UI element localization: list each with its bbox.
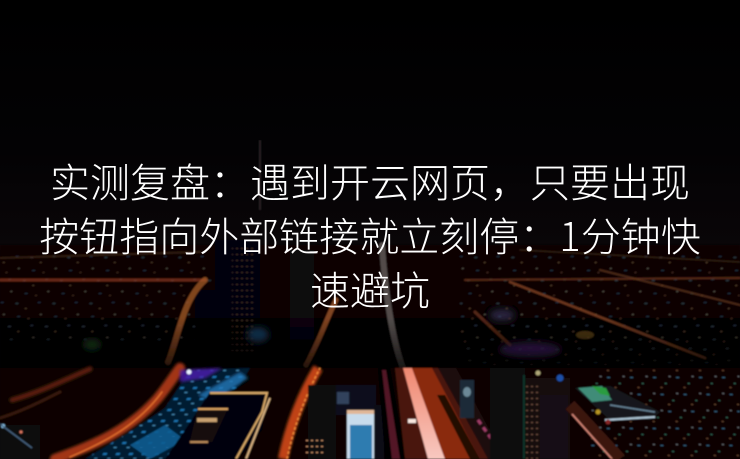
building with lit edges <box>165 392 270 459</box>
road with white light trail, right <box>570 405 620 459</box>
upper roads <box>0 245 740 368</box>
mid buildings and billboard <box>303 385 384 459</box>
spire tower <box>195 140 314 370</box>
title: 按钮指向外部链接就立刻停：1分钟快 <box>39 205 701 263</box>
orange curved road, left <box>0 368 180 459</box>
dark fade towards the photo's lighter edge <box>0 318 740 368</box>
central highway with light trails <box>378 368 505 459</box>
whole photo scene <box>0 140 740 459</box>
blue lit district <box>0 368 250 459</box>
title: 实测复盘：遇到开云网页，只要出现 <box>50 151 690 209</box>
orange boulevard, centre-left <box>283 368 320 459</box>
lower photo base <box>0 368 740 459</box>
tower, right of highway <box>490 368 570 459</box>
green-lit low building complex <box>575 386 660 424</box>
purple and blue glows <box>84 309 594 357</box>
title <box>39 151 701 317</box>
title: 速避坑 <box>310 259 430 317</box>
city lights: ground texture <box>0 245 740 459</box>
